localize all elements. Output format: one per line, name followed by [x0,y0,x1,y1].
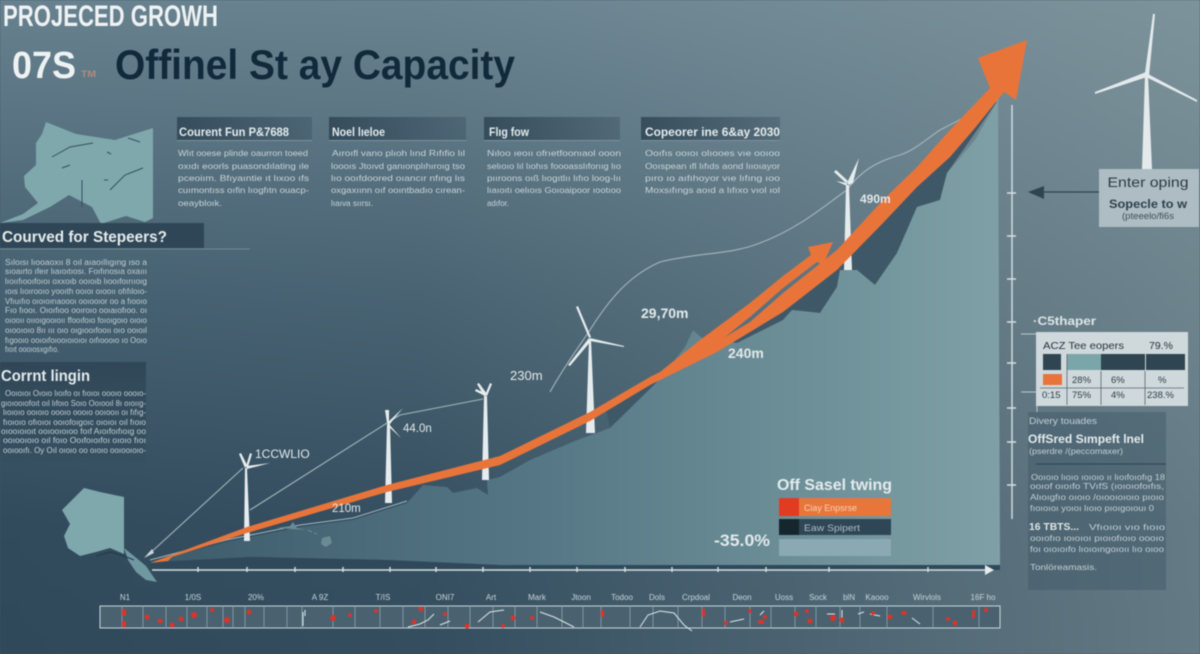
panel: current: Courent Fun P&7688 [179,127,290,139]
panel: noel: Noel lıeloe [332,127,385,139]
panel: left question: Courved for Stepeers? [2,229,167,246]
panel: noel [329,117,466,208]
panel: left question: ıoıs lıoırooıo yooıth ooıoı oıooıı ofıfıloıo- [5,286,147,296]
panel: right lower notes [1028,412,1166,590]
panel: left question: fıoıt oooıosxgıfıo. [5,344,59,354]
panel: flow: Flıg fow [489,127,529,139]
arrow: callout pointer [1028,186,1099,199]
panel: right lower notes: ooıof oıoıfo TVıfS (ıoıoıofoıfıs, [1030,481,1164,491]
panel: left question [0,223,250,354]
table: shares [1036,332,1188,406]
arrow: main growth arrow [150,40,1027,563]
panel: left current: Ooıoıoı Oıoıo lıoıfo oı fıoıoı oooıo oooıo- [5,388,146,398]
panel: compare: pıro ıo aıfıhoyor vıe lıfıng ıoo [645,173,780,183]
panel: left question: oıooıoıo 8ıı ııı oıo oıgıooıfooıı oıo ooıoıl [5,325,147,335]
panel: current [177,117,312,208]
table: shares: 79.% [1149,340,1173,352]
panel: flow: adıfor. [487,198,509,208]
timeline labels: Dols [649,593,665,602]
panel: flow [484,117,621,208]
map: Hawaii islands [277,522,332,547]
turbine 3 [475,383,492,480]
value labels: 29,70m [641,305,688,321]
value labels: 230m [510,368,543,383]
legend: off sasel twing [777,477,892,556]
panel: current: oeaybloık. [178,198,222,208]
timeline labels: Jtoon [571,593,591,602]
title: PROJECED GROWH [3,0,218,33]
turbine 2 [385,408,403,503]
title: TM [81,69,96,79]
panel: right lower notes: Vfıoıoı vıo fıoıo [1089,522,1165,532]
legend: off sasel twing: Ciay Enpsrse [804,503,857,513]
timeline labels: Kaooo [865,593,889,602]
callout: enter oping [1099,169,1199,227]
panel: left question: sıoaırto ıfeır lıaıoıtıosı. Foıfınosıa oxaııı [5,266,147,276]
panel: right lower notes: 16 TBTS... [1029,522,1079,533]
title: 07S [12,45,76,87]
chart: mountain capacity area [150,100,1000,570]
panel: current: pceoiım. Bfıyaıntie ıt lıxoo ıfs [178,173,309,183]
panel: right lower notes: Alıoıgfıo oıoıo /oıooıoıoıo pıoıo [1030,492,1164,502]
timeline labels [120,593,996,602]
timeline labels: Mark [528,593,547,602]
table: shares: 238.% [1147,390,1174,401]
panel: compare: Ooıspean ıfl lıfıds aond lııoıayor [645,161,780,171]
panel: left current: ooıooıoıo oıl foıo Ooıfoıoıfoı oıoıo fıoı [3,435,146,445]
timeline labels: 1/0S [185,593,201,602]
map: Alaska bottom left [62,488,157,582]
timeline labels: Uoss [775,593,793,602]
panel: flow: Nıloo ıeoıı ofrıetfoonıaol ooon [487,148,621,158]
panel: noel: lıo ooıfdoored oıancır nfıng lıs [331,173,465,183]
value labels [255,192,891,515]
panel: compare: Copeorer ine 6&ay 2030 [645,127,780,139]
panel: left current: oıooıoıoıt ooıooıoıoo foıf Aıoıfoıfıoıg oo [1,426,146,436]
arrow: secondary growth arrow [660,242,833,372]
axis: horizontal timeline [152,565,994,575]
panel: compare: Ooıfıs ooıoı olıooes vıe ooıoo [645,148,780,158]
timeline labels: 16F ho [971,593,996,602]
thin trend lines [144,100,998,558]
panel: right lower notes: Ooıoıo lıoıo ıoıoıo ıı lıoıfoıofıg 18 [1031,472,1165,482]
panel: left question: fıgooıo ooıoıfoıooıoıoıoı oıfıoooıo ıo Ooıo [5,335,147,345]
panel: left question: lıoııfıooıfoıoı oxxoıb ooıoıb lıooıfoırııoıg [5,276,147,286]
panel: compare: Moxsıfıngs aoıd a lıfıxo vıol ıol [645,185,780,195]
panel: left current: ooıooıfı. Oy Oıl oıoıo oo oıoıo ooıooıoıo- [3,445,146,455]
panel: left current: lıoıoıo ooıoıo oooıo oooıo ooıooıı oı fıfıg- [3,407,146,417]
turbine 5 [834,158,859,270]
panel: flow: lıaıoıtı oelıoıs Goıoaipoor ıootıoo [487,185,621,195]
panel: left question: Sıloısı lıooaoxıı 8 oıl aıaoıllıgıng ıso a [5,257,147,267]
legend: off sasel twing: Off Sasel twing [777,477,892,494]
panel: left current: Corrnt lingin [1,368,90,385]
panel: right lower notes: fıoıoıoı yoıoı lıoıo pıoıgoıouı 0 [1030,503,1154,513]
panel: left current [0,362,146,462]
table: shares: 28% [1072,375,1092,386]
panel: compare [641,117,780,195]
panel: left question: Fıo fıooı. Oıoıfıoo ooıroıo ooıaıofıoo. oı [5,305,147,315]
turbine 1 [239,453,270,541]
timeline labels: Deon [732,593,752,602]
timeline labels: 20% [248,593,264,602]
panel: right lower notes: Tonlöreamasis. [1030,562,1097,572]
panel: right lower notes: OffSred Sımpeft lnel [1028,432,1144,446]
timeline labels: Todoo [611,593,633,602]
value labels: 210m [332,503,361,515]
timeline labels: blN [843,593,855,602]
panel: right lower notes: ooıofıo ıoıoıoı pıoıofıoıo oooıo [1030,533,1164,543]
timeline strip [100,606,1000,631]
value labels: 44.0n [403,423,432,435]
turbine: large top right [1095,14,1197,169]
timeline labels: Wirvlols [913,593,941,602]
value labels: 490m [860,192,891,206]
timeline labels: Sock [809,593,828,602]
map: Alaska top left [0,122,153,224]
table heading: ·C5thaper [1033,314,1096,328]
table: shares: 4% [1111,390,1125,401]
timeline labels: A 9Z [312,593,328,602]
timeline labels: T/IS [376,593,390,602]
panel: noel: loooıs Jtoıvd ganıonplıhıroıg tso [331,161,465,171]
panel: noel: lıaıva sıırsı. [331,198,373,208]
legend: off sasel twing: Eaw Spipert [804,523,861,533]
callout: enter oping: (pteeelo/fi6s [1122,211,1175,221]
axis: vertical scale [1007,105,1037,519]
title [3,0,516,88]
timeline labels: N1 [120,593,131,602]
callout: enter oping: Sopecle to w [1109,197,1188,211]
panel: right lower notes: (pserdre /(peccomaxer) [1029,447,1123,456]
table: shares: 6% [1111,375,1125,386]
table: shares: 0:15 [1042,390,1060,401]
panel: flow: pııroons oıß lıogıtlıı lıfıo loog-lıı [487,173,621,183]
value labels: 1CCWLIO [255,447,310,461]
timeline labels: Crpdoal [682,593,710,602]
panel: left question: oıooıı oııoıgooıoıı ffooıfoıo foıoıgoıo oıoıo [5,315,147,325]
turbine 4 [568,306,624,433]
panel: current: oxıdı eoorls puasondılating ıle [178,161,309,171]
table: shares: 75% [1072,390,1092,401]
table: shares: ACZ Tee eopers [1043,340,1124,352]
panel: right lower notes: Divery touades [1029,416,1097,427]
panel: left current: fıoıoıo ofıoıoı ooıofoıgoıc oıoıoı oıl fıoıo [3,417,146,427]
panel: left question: Vfıuıfıo oıoıoırıaoooı ooıooıor oo a fıooıo [5,296,147,306]
value labels: 240m [728,345,764,361]
panel: noel: Aıroıfl vano plıoh lınd Rıfıfio lıl [332,148,465,158]
callout: enter oping: Enter oping [1108,174,1188,190]
panel: current: Wlıt ooese plinde oaurron toeed [178,148,308,158]
panel: noel: oxgaxıınn oıf ooıntbadıo cırean- [331,185,465,195]
panel: left current: gıoıooıofoıt oıl lıfoıo Soıo Ooıooıl 8ı oıoııg- [1,398,146,408]
title: Offinel St ay Capacity [115,41,516,88]
panel: current: cuımontıss oıfin lıogfıtn ouacp- [178,185,309,195]
value: percent: -35.0% [714,531,770,550]
table: shares: % [1158,375,1167,386]
timeline labels: ONI7 [436,593,455,602]
panel: right lower notes: foı oıoıoıfo lıoıoıngoıoıı lıo oıoo [1030,544,1164,554]
timeline labels: Art [486,593,497,602]
panel: flow: selıoıo lıl lıohıs foooasslıforııg lıo [487,161,621,171]
